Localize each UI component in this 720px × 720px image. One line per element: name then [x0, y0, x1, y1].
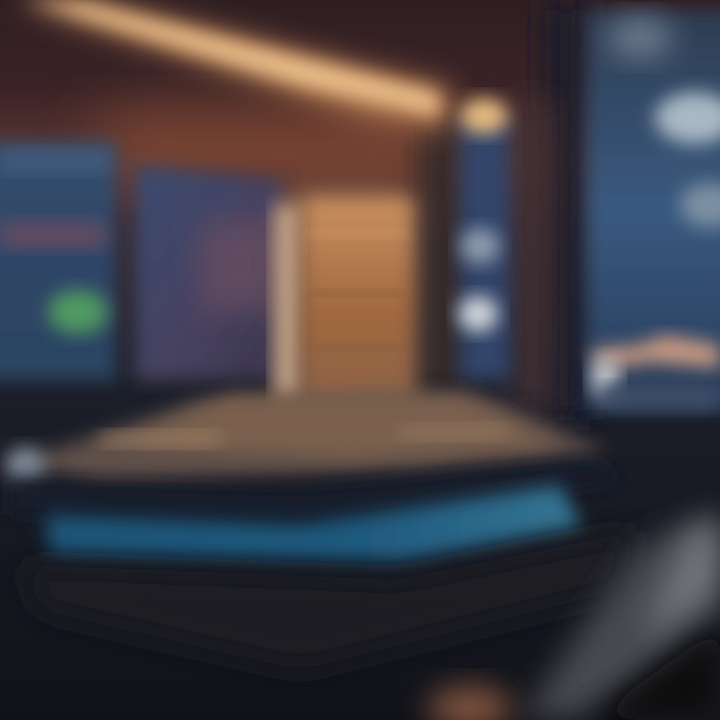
- glowing tower: [274, 190, 415, 430]
- centre screen panel: [135, 165, 285, 380]
- blue desk band: [45, 485, 582, 562]
- desk top with model city: [5, 395, 610, 483]
- floor reflection right: [520, 510, 720, 720]
- narrow window: [458, 98, 510, 380]
- left screen panel: [0, 142, 116, 380]
- desk lower curve: [20, 530, 640, 670]
- floor warm reflection: [428, 686, 512, 720]
- right city window: [586, 10, 720, 410]
- ceiling light streak: [10, 0, 450, 130]
- desk dark edge: [10, 462, 620, 525]
